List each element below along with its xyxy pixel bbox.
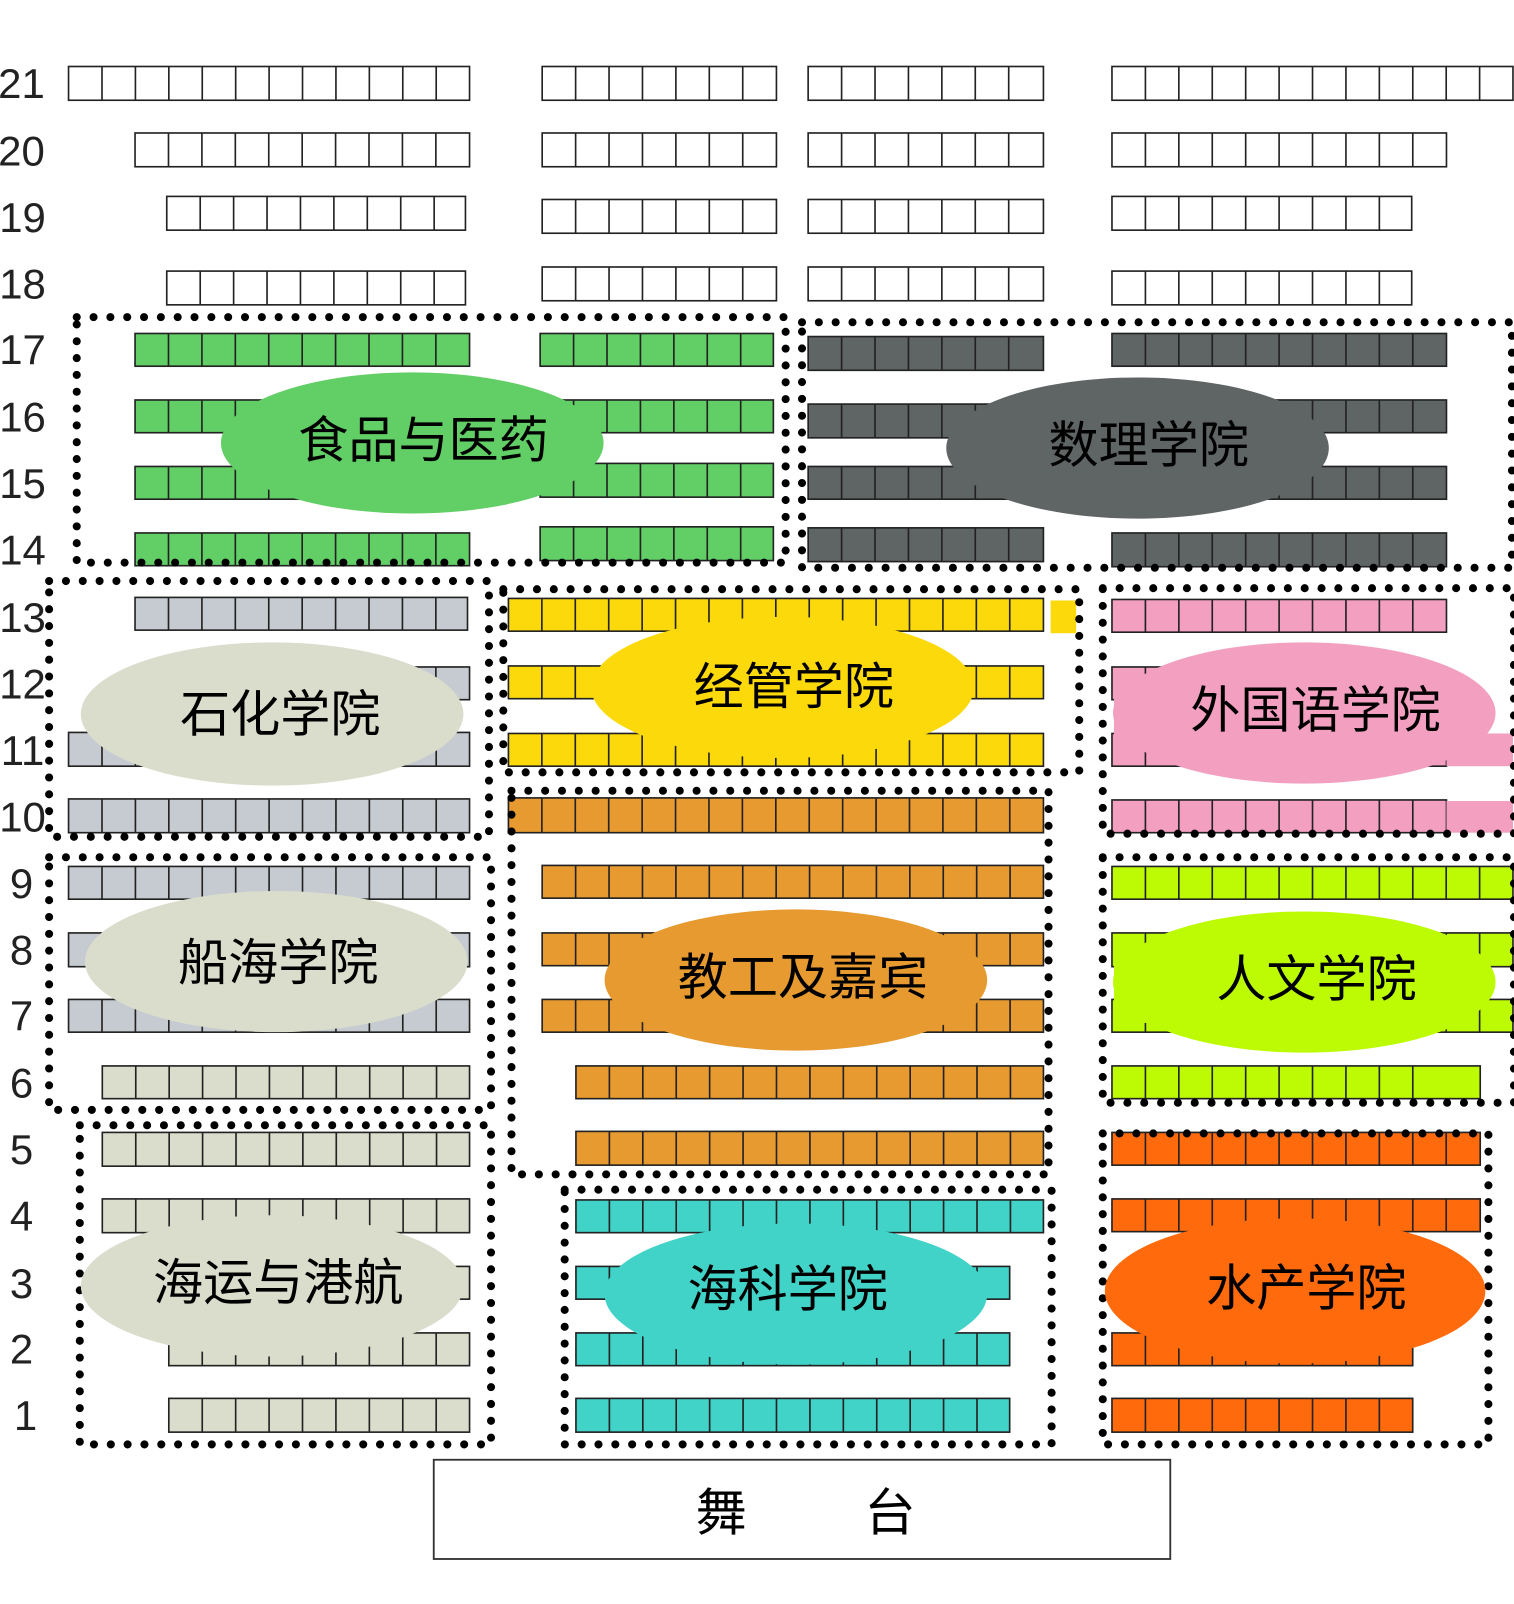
panel: 数理学院 [802, 322, 1512, 568]
college label: 海运与港航 [153, 1255, 404, 1311]
college label: 食品与医药 [298, 412, 549, 468]
college label [81, 642, 463, 786]
college label [946, 377, 1329, 519]
row numbers: 9 [10, 860, 33, 907]
panel: 水产学院 [1103, 1132, 1488, 1444]
row numbers: 15 [0, 460, 46, 507]
college label [1105, 1218, 1485, 1364]
row numbers: 19 [0, 194, 46, 241]
panel: 食品与医药 [77, 317, 786, 566]
college label [1113, 642, 1496, 784]
college label: 人文学院 [1216, 951, 1417, 1007]
row numbers: 10 [0, 794, 46, 841]
dotted boundary [77, 317, 786, 563]
college label: 外国语学院 [1190, 682, 1441, 738]
row numbers: 13 [0, 594, 46, 641]
row numbers [0, 60, 46, 1439]
seats [576, 1200, 1043, 1432]
seats [69, 597, 470, 833]
dotted boundary [1103, 1133, 1488, 1444]
unassigned seats rows 18-21 [69, 66, 1513, 305]
seats [508, 598, 1076, 766]
college label [85, 891, 468, 1032]
row numbers: 4 [10, 1193, 33, 1240]
dotted boundary [802, 322, 1512, 568]
row numbers: 7 [10, 992, 33, 1039]
dotted boundary [565, 1190, 1052, 1444]
panel: 石化学院 [49, 581, 489, 837]
college label: 数理学院 [1049, 417, 1249, 473]
panel: 人文学院 [1103, 857, 1514, 1103]
row numbers: 11 [1, 727, 44, 774]
seats [69, 866, 470, 1099]
row numbers: 3 [10, 1260, 33, 1307]
seats [135, 333, 773, 566]
row numbers: 14 [0, 527, 46, 574]
dotted boundary [80, 1125, 491, 1444]
college label [221, 372, 604, 514]
panel: 海运与港航 [80, 1125, 491, 1444]
panel: 海科学院 [565, 1190, 1052, 1444]
row numbers: 12 [0, 661, 46, 708]
dotted boundary [1103, 857, 1514, 1103]
seats [1112, 1132, 1480, 1432]
college label: 教工及嘉宾 [678, 949, 928, 1005]
college label [605, 909, 987, 1051]
college label: 石化学院 [180, 686, 381, 742]
row numbers: 6 [10, 1060, 33, 1107]
dotted boundary [503, 589, 1079, 772]
seats [1112, 866, 1513, 1099]
dotted boundary [49, 857, 491, 1110]
seats [102, 1132, 470, 1432]
college label: 海科学院 [687, 1261, 888, 1317]
seats [808, 333, 1446, 567]
stage: 舞 [696, 1484, 747, 1541]
row numbers: 8 [10, 927, 33, 974]
panel: 教工及嘉宾 [508, 791, 1049, 1174]
college label [605, 1223, 987, 1365]
dotted boundary [49, 581, 489, 837]
seats [1112, 599, 1513, 833]
row numbers: 2 [10, 1326, 33, 1373]
row numbers: 17 [0, 326, 46, 373]
college label: 水产学院 [1206, 1260, 1407, 1316]
row numbers: 5 [10, 1126, 33, 1173]
college label: 船海学院 [178, 935, 378, 991]
college label [591, 617, 974, 758]
row numbers: 1 [14, 1392, 37, 1439]
row numbers: 16 [0, 394, 46, 441]
seats [508, 798, 1043, 1165]
row numbers: 18 [0, 261, 46, 308]
stage: 台 [864, 1484, 916, 1541]
stage [434, 1460, 1170, 1559]
panel: 船海学院 [49, 857, 491, 1110]
dotted boundary [1103, 588, 1514, 834]
panel: 外国语学院 [1103, 588, 1514, 834]
college label [1113, 911, 1496, 1053]
panel: 经管学院 [503, 589, 1079, 772]
college label [81, 1215, 463, 1356]
college label: 经管学院 [694, 659, 894, 715]
dotted boundary [511, 791, 1049, 1174]
